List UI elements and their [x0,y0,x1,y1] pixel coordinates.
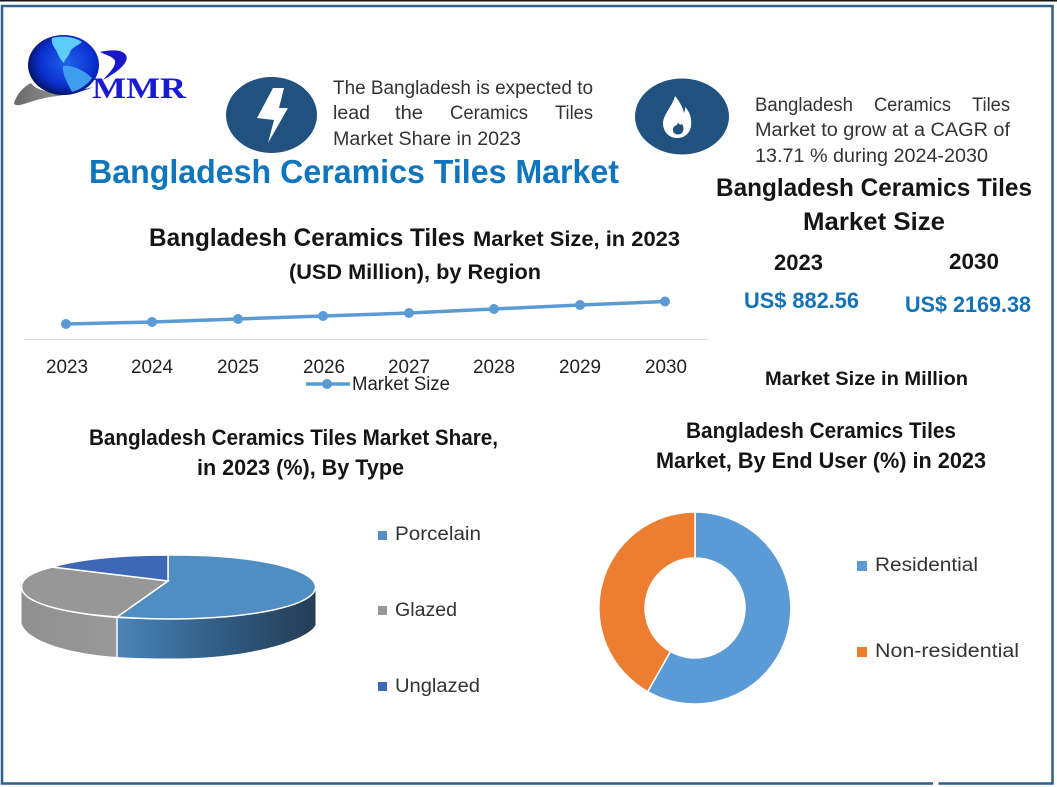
pie legend [378,524,481,697]
heading: market size panel [716,174,1032,236]
value 2023: US$ 882.56 [744,288,859,313]
donut legend: Residential [875,555,978,576]
heading: line chart: (USD Million), by Region [289,261,541,284]
pie top: porcelain [117,555,316,619]
heading: pie chart: in 2023 (%), By Type [197,455,404,480]
market size values [744,249,1031,390]
pie legend: Unglazed [395,676,480,697]
logo globe [28,35,99,95]
heading: line chart [149,224,680,284]
heading: donut chart: Bangladesh Ceramics Tiles [686,418,956,443]
line chart: 2030 [645,357,687,378]
text block: CAGR: Market to grow at a CAGR of [755,120,1011,141]
icon: flame [635,78,729,154]
line chart: 2029 [559,357,601,378]
heading: line chart: Bangladesh Ceramics Tiles [149,224,465,252]
title: Bangladesh Ceramics Tiles Market [89,153,619,190]
pie side: glazed [22,587,117,657]
logo text: MMR [92,72,186,105]
pie legend: Glazed [395,600,457,621]
heading: donut chart: Market, By End User (%) in 2023 [656,448,986,473]
heading: pie chart [89,425,498,480]
text block: Bangladesh share [333,78,593,150]
donut chart [599,512,791,704]
logo swoosh [14,83,93,105]
line chart legend [306,374,450,395]
logo: MMR globe [14,35,186,105]
logo swirl [100,50,127,80]
heading: market size panel: Bangladesh Ceramics Tiles [716,174,1032,202]
text block: Bangladesh share: the [395,103,423,124]
text block: Bangladesh share: Ceramics [450,103,528,124]
line chart: 2024 [131,357,173,378]
line chart: 2027 [388,357,430,378]
text block: Bangladesh share: Market Share in 2023 [333,129,521,150]
heading: line chart: Market Size, in 2023 [473,228,680,251]
heading: donut chart [656,418,986,473]
text block: CAGR: Tiles [972,95,1010,116]
line chart legend: Market Size [352,374,450,395]
donut legend [857,555,1019,662]
line chart: 2023 [46,357,88,378]
icon: lightning bolt [226,77,317,153]
line chart [24,296,708,395]
text block: CAGR: Ceramics [874,95,951,116]
line chart: 2028 [473,357,515,378]
donut: non-residential [599,512,695,692]
pie top: unglazed [52,555,168,581]
text block: Bangladesh share: The Bangladesh is expected to [333,78,593,99]
year 2030: 2030 [949,249,999,274]
text block: CAGR: Bangladesh [755,95,853,116]
text block: CAGR: 13.71 % during 2024-2030 [755,146,988,167]
donut legend: Non-residential [875,641,1019,662]
value 2030: US$ 2169.38 [905,292,1031,317]
pie legend: Porcelain [395,524,481,545]
text block: Bangladesh share: Tiles [555,103,593,124]
unit note: Market Size in Million [765,369,968,390]
donut: residential [648,512,791,704]
year 2023: 2023 [774,250,823,275]
text block: CAGR [755,95,1011,167]
line chart: 2025 [217,357,259,378]
text block: Bangladesh share: lead [333,103,370,124]
pie side: porcelain [117,587,316,659]
heading: market size panel: Market Size [803,208,945,236]
line chart: 2026 [303,357,345,378]
pie chart [22,555,316,659]
heading: pie chart: Bangladesh Ceramics Tiles Market Share, [89,425,498,450]
pie top: glazed [22,567,168,617]
